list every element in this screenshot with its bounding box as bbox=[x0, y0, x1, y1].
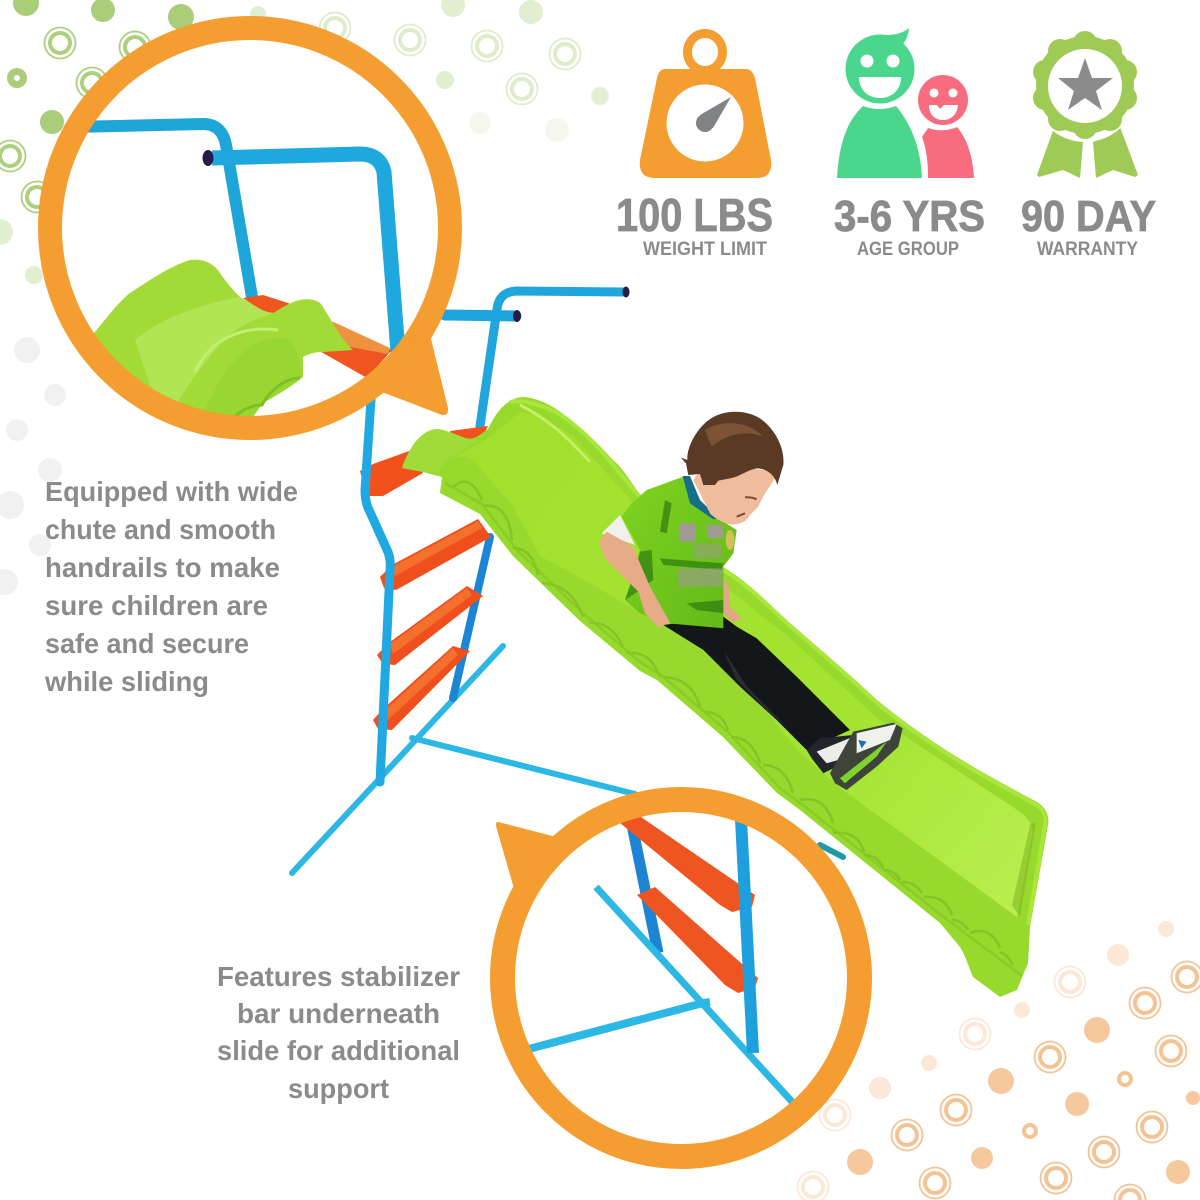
rear ladder pole and handrail bbox=[445, 286, 630, 698]
background dots: green cluster top left bbox=[0, 0, 609, 595]
text block: wide chute and handrails: sure children are bbox=[45, 590, 268, 621]
pink figure bbox=[918, 75, 974, 178]
stat: warranty: WARRANTY bbox=[1037, 239, 1138, 260]
child sliding bbox=[599, 412, 903, 790]
text block: wide chute and handrails: Equipped with wide bbox=[45, 476, 298, 507]
callout white disc bbox=[502, 799, 860, 1157]
slide frame: ladder with handrails, steps and base bbox=[292, 286, 843, 873]
rear shoe bbox=[807, 735, 857, 773]
callout magnified photo bbox=[70, 124, 398, 425]
text block: stabilizer bar: support bbox=[288, 1073, 389, 1104]
icon: warranty rosette with star bbox=[1033, 31, 1138, 178]
magnified steps bbox=[620, 815, 755, 912]
stat: warranty bbox=[1021, 192, 1156, 260]
stat: age group: AGE GROUP bbox=[857, 239, 959, 260]
eye and mouth bbox=[737, 497, 757, 517]
stat: weight limit: WEIGHT LIMIT bbox=[643, 239, 767, 260]
magnified front pole bbox=[740, 800, 753, 1053]
callout pointer bbox=[382, 335, 448, 415]
chute body and side wall bbox=[402, 397, 1048, 997]
text block: wide chute and handrails bbox=[44, 476, 298, 697]
stat: age group: 3-6 YRS bbox=[834, 192, 985, 241]
callout pointer bbox=[496, 822, 560, 892]
stat: warranty: 90 DAY bbox=[1021, 192, 1156, 241]
magnified channel shading bbox=[135, 297, 272, 402]
scallops on chute side bbox=[453, 482, 1013, 965]
neck and face bbox=[693, 463, 778, 524]
magnified scallop edge bbox=[234, 376, 300, 416]
icon: weight with dial bbox=[640, 34, 771, 178]
chute upper rim highlight bbox=[510, 401, 1046, 925]
orange steps bbox=[360, 426, 491, 730]
text block: stabilizer bar: Features stabilizer bbox=[217, 961, 460, 992]
magnified orange platform bbox=[243, 295, 392, 378]
magnified slide top bbox=[94, 260, 353, 410]
green slide chute bbox=[402, 397, 1048, 997]
stat: weight limit: 100 LBS bbox=[616, 189, 773, 241]
text block: stabilizer bar bbox=[217, 961, 460, 1104]
rear arm bbox=[722, 580, 742, 623]
slide head lip bbox=[402, 429, 478, 472]
shirt bbox=[622, 477, 737, 628]
green figure bbox=[837, 28, 922, 178]
chute end shading bbox=[1012, 822, 1036, 917]
hair bbox=[681, 412, 784, 485]
callout orange ring bbox=[50, 28, 450, 428]
text block: wide chute and handrails: chute and smooth bbox=[45, 514, 276, 545]
undershirt sleeve bbox=[602, 515, 635, 545]
zoom callout: handrail detail bbox=[50, 28, 450, 428]
icon: adult and child bbox=[837, 28, 974, 178]
chute highlights bbox=[520, 405, 590, 462]
magnified rear pole bbox=[630, 815, 658, 953]
magnified rails bbox=[70, 124, 398, 352]
callout orange ring bbox=[502, 800, 860, 1156]
front ladder pole bbox=[365, 400, 390, 782]
shirt graphics bbox=[678, 523, 734, 587]
teal stabilizer end bbox=[820, 845, 843, 857]
chute channel surface bbox=[450, 412, 1033, 917]
zoom callout: stabilizer bar detail bbox=[496, 799, 860, 1157]
text block: wide chute and handrails: safe and secure bbox=[45, 628, 249, 659]
front shoe bbox=[830, 723, 903, 790]
text block: wide chute and handrails: while sliding bbox=[44, 666, 209, 697]
base bars bbox=[292, 646, 635, 873]
magnified base and stabilizer bbox=[525, 887, 795, 1105]
callout white disc bbox=[50, 28, 450, 428]
text block: stabilizer bar: bar underneath bbox=[237, 998, 440, 1029]
text block: stabilizer bar: slide for additional bbox=[217, 1035, 460, 1066]
background dots: orange cluster bottom right bbox=[798, 921, 1200, 1200]
callout magnified photo bbox=[525, 800, 795, 1105]
shirt shadows bbox=[625, 500, 723, 613]
text block: wide chute and handrails: handrails to make bbox=[45, 552, 280, 583]
stat: weight limit bbox=[616, 189, 773, 260]
shirt collar bbox=[683, 476, 718, 519]
stat: age group bbox=[834, 192, 985, 260]
pants bbox=[663, 617, 850, 750]
arm and hand bbox=[599, 532, 670, 627]
side wall lower lip bbox=[445, 483, 1022, 976]
